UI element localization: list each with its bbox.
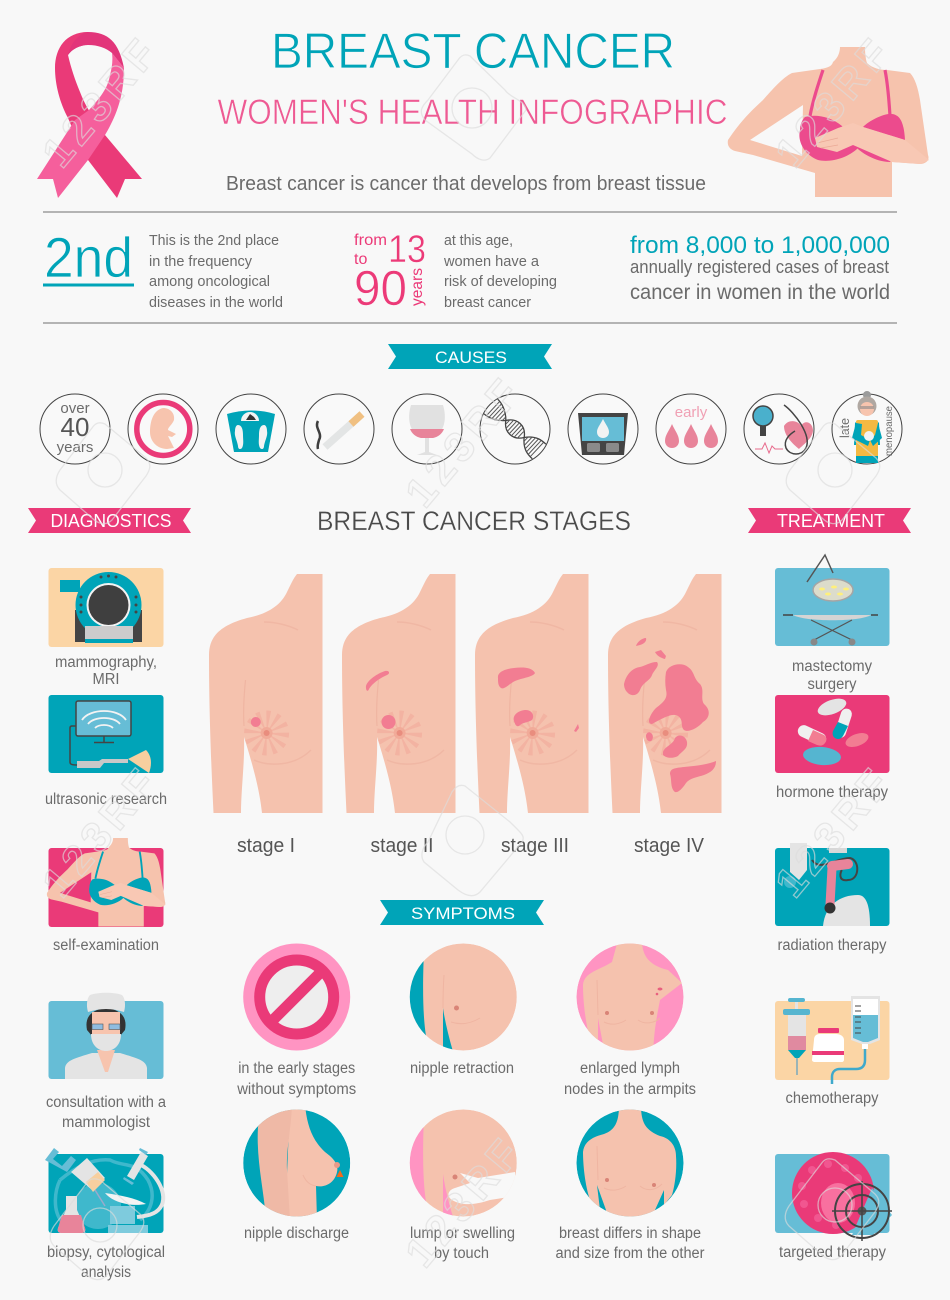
heading: breast cancer stages: BREAST CANCER STAGES — [317, 506, 631, 536]
label: breast differs in shape — [559, 1225, 701, 1242]
title: BREAST CANCER — [271, 23, 675, 79]
label: surgery — [808, 676, 857, 693]
label: stage IV — [634, 835, 705, 857]
label: ultrasonic research — [45, 791, 167, 808]
text: 123RF — [766, 31, 898, 176]
label: nipple retraction — [410, 1060, 514, 1077]
stat: 2nd place: This is the 2nd place — [149, 232, 279, 249]
banner: treatment: TREATMENT — [777, 511, 885, 531]
cause: alcohol, wine glass — [392, 394, 462, 464]
card: targeted therapy — [775, 1152, 892, 1261]
icon: pink awareness ribbon — [37, 32, 142, 198]
stat: from 13 to 90 years: risk of developing — [444, 273, 557, 290]
stat: annual cases: cancer in women in the world — [630, 281, 890, 304]
text: 123RF — [33, 761, 165, 906]
stat: from 13 to 90 years — [354, 228, 557, 316]
symptom: no symptoms in early stages — [236, 944, 356, 1098]
tumor — [251, 717, 261, 727]
label: mammologist — [62, 1114, 151, 1131]
card: mammography MRI — [48, 568, 164, 688]
stat: from 13 to 90 years: women have a — [443, 253, 540, 270]
stat: from 13 to 90 years: 13 — [388, 228, 426, 271]
banner: diagnostics: DIAGNOSTICS — [50, 511, 172, 531]
cause: late menopause, grandmother — [832, 391, 902, 464]
label: and size from the other — [556, 1245, 704, 1262]
cause: heredity, DNA — [480, 394, 550, 464]
text: 123RF — [33, 31, 165, 176]
causes icon row — [40, 391, 902, 464]
cause: early menstruation, drops — [656, 394, 726, 464]
card: self-examination — [47, 838, 166, 954]
cause: diabetes, blood sugar meter — [568, 394, 638, 464]
label: stage I — [237, 835, 295, 857]
label: enlarged lymph — [580, 1060, 680, 1077]
banner: causes — [388, 344, 552, 369]
cause: late menopause, grandmother: menopause — [884, 406, 895, 456]
stat: from 13 to 90 years: breast cancer — [444, 294, 531, 311]
subtitle: WOMEN'S HEALTH INFOGRAPHIC — [218, 93, 728, 132]
text: 123RF — [766, 761, 898, 906]
cause: late menopause, grandmother: late — [837, 418, 852, 438]
label: targeted therapy — [779, 1244, 886, 1261]
text: 123RF — [396, 371, 528, 516]
stat: from 13 to 90 years: years — [409, 268, 426, 306]
stat: from 13 to 90 years: to — [354, 251, 367, 268]
symptom: nipple discharge — [243, 1105, 350, 1242]
tumors — [366, 671, 396, 729]
label: self-examination — [53, 937, 159, 954]
stat: 2nd place: among oncological — [149, 273, 270, 290]
symptom: breast differs in shape and size — [556, 1105, 704, 1262]
cause: hypertension, tonometer and heart — [744, 394, 814, 464]
tumors — [498, 668, 579, 732]
text: 123RF — [396, 1131, 528, 1276]
label: MRI — [92, 671, 120, 688]
cause: no childbirth, embryo — [128, 394, 198, 464]
label: analysis — [81, 1264, 131, 1281]
panel: diagnostics list — [45, 568, 167, 1281]
symptom: enlarged lymph nodes in the armpits — [564, 940, 696, 1098]
label: nodes in the armpits — [564, 1081, 696, 1098]
stat: 2nd place: 2nd — [44, 226, 133, 290]
label: nipple discharge — [244, 1225, 349, 1242]
panel: treatment list — [775, 555, 892, 1261]
banner: diagnostics — [28, 508, 191, 533]
card: consultation with a mammologist — [46, 993, 166, 1131]
panel: stage I — [209, 574, 322, 857]
label: without symptoms — [236, 1081, 356, 1098]
label: chemotherapy — [786, 1090, 879, 1107]
stat: 2nd place — [43, 226, 283, 311]
cause: early menstruation, drops: early — [675, 404, 708, 421]
label: stage II — [370, 835, 434, 857]
card: radiation therapy — [775, 843, 890, 954]
stat: 2nd place: in the frequency — [149, 253, 252, 270]
stat: annual cases: annually registered cases of breast — [630, 257, 889, 277]
panel: stage III — [475, 574, 588, 857]
label: mastectomy — [792, 658, 872, 675]
stat: annual cases — [630, 232, 890, 304]
stats band — [43, 212, 897, 323]
panel: stage IV — [608, 574, 722, 857]
stat: annual cases: from 8,000 to 1,000,000 — [630, 232, 890, 259]
card: chemotherapy — [775, 996, 890, 1107]
banner: treatment — [748, 508, 911, 533]
cause: over 40 years: over — [60, 400, 90, 417]
stat: from 13 to 90 years: 90 — [354, 262, 407, 316]
label: by touch — [434, 1245, 489, 1262]
card: hormone therapy — [775, 695, 890, 801]
cause: smoking, cigarette — [304, 394, 374, 464]
stat: 2nd place: diseases in the world — [149, 294, 283, 311]
label: consultation with a — [46, 1094, 166, 1111]
stat: from 13 to 90 years: from — [354, 232, 387, 249]
card: ultrasonic research — [45, 695, 167, 808]
cause: over 40 years: 40 — [61, 412, 89, 442]
label: biopsy, cytological — [47, 1244, 165, 1261]
label: stage III — [501, 835, 569, 857]
panel: stage II — [342, 574, 456, 857]
label: mammography, — [55, 654, 157, 671]
stat: from 13 to 90 years: at this age, — [444, 232, 513, 249]
symptom: nipple retraction — [405, 944, 517, 1077]
tumors — [624, 638, 716, 792]
icon: woman self-check, pink bra — [728, 47, 929, 197]
banner: causes: CAUSES — [435, 348, 507, 367]
tagline: Breast cancer is cancer that develops from breast tissue — [226, 173, 706, 195]
card: biopsy cytological analysis — [45, 1148, 165, 1281]
banner: symptoms: SYMPTOMS — [411, 904, 515, 923]
label: in the early stages — [238, 1060, 355, 1077]
label: hormone therapy — [776, 784, 888, 801]
banner: symptoms — [380, 900, 544, 925]
label: lump or swelling — [410, 1225, 515, 1242]
symptom: lump or swelling by touch — [405, 1110, 517, 1262]
label: radiation therapy — [778, 937, 887, 954]
cause: overweight, scales — [216, 394, 286, 464]
cause: over 40 years — [40, 394, 110, 464]
cause: over 40 years: years — [57, 439, 93, 456]
card: mastectomy surgery — [775, 555, 890, 693]
